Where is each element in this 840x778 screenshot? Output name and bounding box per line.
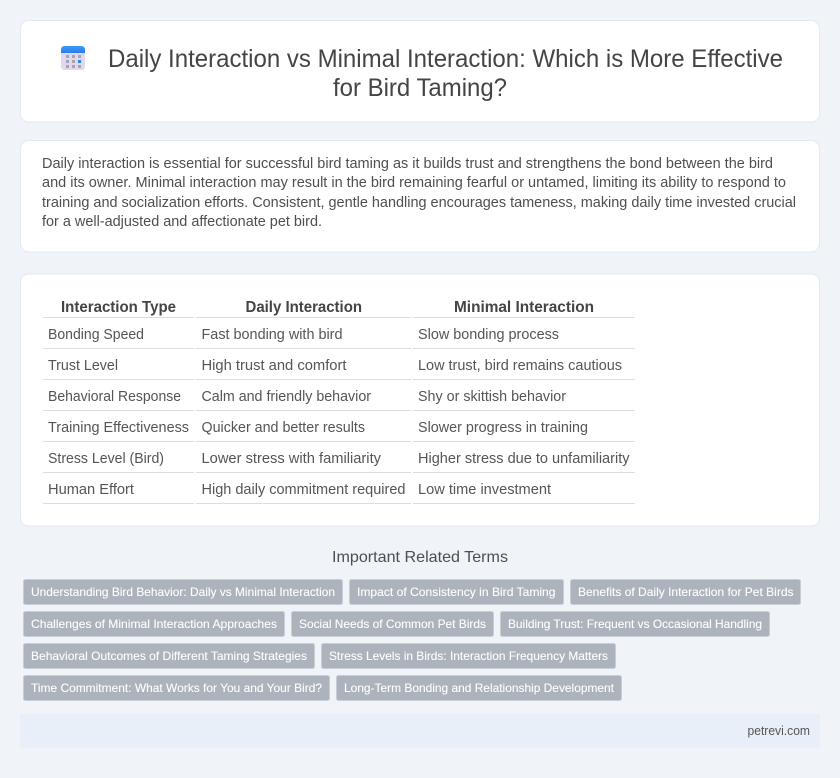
tag: Behavioral Outcomes of Different Taming Strategies bbox=[31, 649, 307, 663]
tag bbox=[24, 676, 330, 700]
table row: trust level: High trust and comfort bbox=[202, 358, 346, 374]
table row: human effort: Low time investment bbox=[418, 482, 551, 498]
table row: stress level: Stress Level (Bird) bbox=[48, 451, 164, 467]
table row: human effort bbox=[43, 482, 635, 504]
tag bbox=[24, 580, 342, 604]
table header row bbox=[43, 299, 635, 318]
text block: summary: Daily interaction is essential for successful bird taming as it builds trust and strengthens the bond between the bird bbox=[42, 156, 773, 172]
table header row: Minimal Interaction bbox=[454, 299, 594, 316]
tag: Impact of Consistency in Bird Taming bbox=[357, 585, 556, 599]
table row: human effort: Human Effort bbox=[48, 482, 134, 498]
panel: comparison table bbox=[20, 274, 820, 526]
tag bbox=[24, 612, 284, 636]
title: for Bird Taming? bbox=[333, 74, 507, 102]
table row: bonding speed: Bonding Speed bbox=[48, 327, 144, 343]
tag list: related terms bbox=[24, 580, 800, 700]
table row: behavioral response: Behavioral Response bbox=[48, 389, 181, 405]
title bbox=[108, 45, 783, 102]
table row: trust level: Trust Level bbox=[48, 358, 118, 374]
table row: bonding speed: Slow bonding process bbox=[418, 327, 559, 343]
table row: behavioral response: Shy or skittish behavior bbox=[418, 389, 566, 405]
tag: Understanding Bird Behavior: Daily vs Minimal Interaction bbox=[31, 585, 335, 599]
table row: training effectiveness bbox=[43, 420, 635, 442]
icon: calendar bbox=[61, 46, 85, 70]
table header row: Interaction Type bbox=[61, 299, 176, 316]
heading: important related terms: Important Related Terms bbox=[332, 549, 508, 566]
tag bbox=[292, 612, 494, 636]
table row: bonding speed: Fast bonding with bird bbox=[202, 327, 342, 343]
table row: stress level: Higher stress due to unfamiliarity bbox=[418, 451, 630, 467]
footer bbox=[20, 714, 820, 748]
table row: stress level bbox=[43, 451, 635, 472]
table row: training effectiveness: Training Effectiveness bbox=[48, 420, 189, 436]
table row: human effort: High daily commitment required bbox=[202, 482, 406, 498]
table header row: Daily Interaction bbox=[246, 299, 362, 316]
table row: training effectiveness: Slower progress in training bbox=[418, 420, 588, 436]
table row: trust level: Low trust, bird remains cautious bbox=[418, 358, 622, 374]
tag: Social Needs of Common Pet Birds bbox=[299, 617, 486, 631]
tag bbox=[350, 580, 564, 604]
tag: Long-Term Bonding and Relationship Development bbox=[344, 681, 615, 695]
tag: Challenges of Minimal Interaction Approaches bbox=[31, 617, 277, 631]
tag: Time Commitment: What Works for You and Your Bird? bbox=[31, 681, 322, 695]
tag bbox=[322, 644, 616, 668]
text block: summary: training and socialization efforts. Consistent, gentle handling encourages tameness, making daily time invested crucial bbox=[42, 195, 796, 211]
table row: stress level: Lower stress with familiarity bbox=[202, 451, 382, 467]
table row: training effectiveness: Quicker and better results bbox=[202, 420, 365, 436]
tag: Benefits of Daily Interaction for Pet Birds bbox=[578, 585, 794, 599]
tag: Building Trust: Frequent vs Occasional Handling bbox=[508, 617, 762, 631]
text block: summary bbox=[42, 156, 796, 230]
tag bbox=[500, 612, 770, 636]
text block: summary: and its owner. Minimal interaction may result in the bird remaining fearful or untamed, limiting its ability to respond to bbox=[42, 175, 786, 191]
table row: behavioral response: Calm and friendly behavior bbox=[202, 389, 371, 405]
tag: Stress Levels in Birds: Interaction Frequency Matters bbox=[329, 649, 608, 663]
tag bbox=[24, 644, 314, 668]
panel: summary paragraph bbox=[20, 140, 820, 252]
panel: title header bbox=[20, 20, 820, 122]
table row: trust level bbox=[43, 358, 635, 380]
text block: summary: for a well-adjusted and affectionate pet bird. bbox=[42, 214, 322, 230]
table row: behavioral response bbox=[43, 389, 635, 410]
table row: bonding speed bbox=[43, 327, 635, 348]
footer: petrevi.com bbox=[748, 723, 810, 738]
tag bbox=[336, 676, 622, 700]
tag bbox=[570, 580, 800, 604]
title: Daily Interaction vs Minimal Interaction: Which is More Effective bbox=[108, 45, 783, 73]
